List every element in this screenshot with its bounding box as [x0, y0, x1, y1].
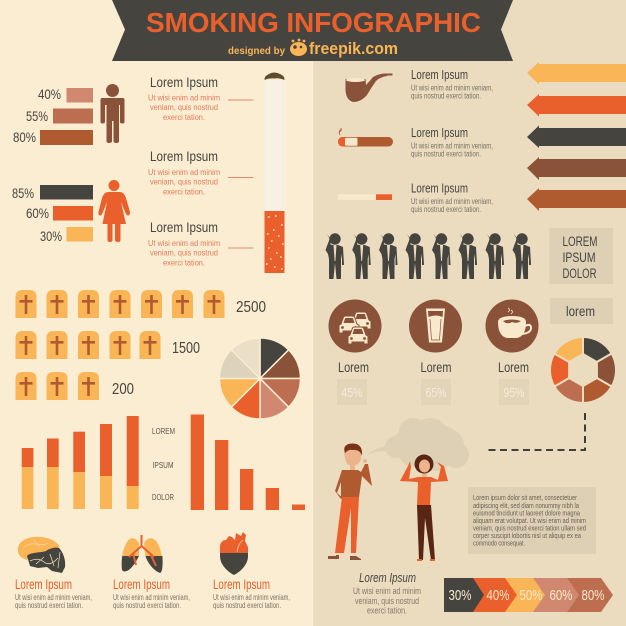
- background: left panel: [0, 0, 313, 626]
- large cigarette: [264, 72, 285, 273]
- icon: man: [100, 84, 124, 143]
- female percentage bars: 60%: [26, 205, 49, 221]
- male percentage bars: [13, 86, 93, 145]
- stat: 45%: Lorem: [338, 360, 369, 375]
- bottom caption: [353, 570, 421, 616]
- callout box: lorem: lorem: [566, 303, 595, 319]
- text block: cigarette label 3: veniam, quis nostrud: [150, 248, 218, 258]
- tombstones row: 200: [16, 372, 134, 400]
- text block: cigarette label 1: Lorem Ipsum: [150, 74, 218, 90]
- stat: 65%: Lorem: [420, 360, 452, 375]
- cigarette text: [411, 182, 493, 214]
- text block: cigarette label 2: Ut wisi enim ad minim: [148, 167, 220, 177]
- text block: cigarette label 1: exerci tation.: [163, 112, 205, 122]
- stat: 65%: [420, 360, 452, 405]
- chart labels: DOLOR: [152, 493, 174, 502]
- text block: cigarette label 3: exerci tation.: [163, 257, 205, 267]
- callout box: lorem ipsum dolor: DOLOR: [562, 266, 597, 281]
- organ caption: heart: Lorem Ipsum: [213, 577, 270, 592]
- female percentage bars: 30%: [40, 228, 62, 244]
- stat: 45%: [337, 360, 369, 405]
- smokers row: [326, 233, 531, 279]
- icon: pipe: [346, 73, 392, 102]
- stat: 95%: Lorem: [498, 360, 529, 375]
- text block: cigarette label 1: veniam, quis nostrud: [150, 102, 218, 112]
- icon: brain: [18, 537, 65, 573]
- text box: euismod tincidunt ut laoreet dolore magna: [473, 508, 581, 518]
- man smoking: [328, 443, 372, 560]
- text block: cigarette label 2: Lorem Ipsum: [150, 148, 218, 164]
- male percentage bars: 80%: [13, 129, 36, 145]
- credit: freepik.com: freepik.com: [309, 39, 398, 58]
- organ caption: lungs: [113, 577, 190, 610]
- icon: cigar: [338, 128, 393, 146]
- female percentage bars: 85%: [12, 185, 34, 201]
- bottom caption: exerci tation.: [367, 606, 407, 616]
- stat: 45%: 45%: [342, 385, 363, 400]
- text block: cigarette label 3: Lorem Ipsum: [150, 219, 218, 235]
- donut chart: [550, 337, 616, 403]
- chevron percentage strip: 30%: [448, 587, 472, 604]
- organ caption: brain: Ut wisi enim ad minim veniam,: [15, 593, 92, 602]
- smoke cloud: [366, 418, 469, 471]
- chevron percentage strip: 60%: [550, 587, 572, 604]
- text box: commodo consequat.: [473, 538, 525, 548]
- callout box: lorem: [550, 298, 613, 324]
- female percentage bars: [12, 185, 93, 244]
- chart labels: IPSUM: [152, 461, 174, 470]
- stat: 95%: 95%: [504, 385, 525, 400]
- icon: lungs: [122, 535, 163, 573]
- text block: cigarette label 2: exerci tation.: [163, 186, 205, 196]
- cigar text: quis nostrud exerci tation.: [411, 150, 481, 158]
- text block: cigarette label 3: [148, 219, 220, 267]
- organ caption: lungs: quis nostrud exerci tation.: [113, 601, 181, 610]
- stat: 95%: [498, 360, 529, 405]
- chevron percentage strip: 50%: [520, 587, 542, 604]
- bottom caption: veniam, quis nostrud: [355, 596, 419, 606]
- organ caption: heart: quis nostrud exerci tation.: [213, 601, 281, 610]
- callout box: lorem ipsum dolor: [550, 228, 613, 284]
- pipe text: quis nostrud exerci tation.: [411, 92, 481, 100]
- text block: cigarette label 3: Ut wisi enim ad minim: [148, 238, 220, 248]
- chevron percentage strip: 40%: [486, 587, 510, 604]
- organ caption: heart: Ut wisi enim ad minim veniam,: [213, 593, 290, 602]
- organ caption: brain: quis nostrud exerci tation.: [15, 601, 83, 610]
- organ caption: lungs: Lorem Ipsum: [113, 577, 170, 592]
- text box: [468, 487, 596, 554]
- icon: traffic circle: [328, 300, 382, 352]
- woman with smoke: [400, 454, 448, 561]
- bottom caption: Lorem Ipsum: [359, 570, 416, 585]
- cigar text: Lorem Ipsum: [411, 126, 468, 140]
- descending bar chart: [191, 414, 305, 510]
- text box: adipiscing elit, sed diam nonummy nibh la: [473, 501, 580, 510]
- text box: Lorem ipsum dolor sit amet, consectetuer: [473, 493, 577, 502]
- icon: heart: [220, 532, 248, 575]
- text box: veniam, quis nostrud exerci tation ullam sed: [473, 524, 586, 532]
- text block: cigarette label 1: [148, 74, 220, 122]
- male percentage bars: 40%: [38, 86, 61, 102]
- bottom caption: Ut wisi enim ad minim: [353, 586, 421, 596]
- organ caption: brain: [15, 577, 92, 610]
- text box: corper suscipit lobortis nisl ut aliquip ex ea: [473, 531, 582, 540]
- cigarette text: Lorem Ipsum: [411, 182, 468, 196]
- tombstones row: 2500: 2500: [236, 299, 266, 316]
- organ caption: lungs: Ut wisi enim ad minim veniam,: [113, 593, 190, 602]
- pipe text: Lorem Ipsum: [411, 68, 468, 82]
- pipe text: Ut wisi enim ad minim veniam,: [411, 84, 493, 92]
- title: SMOKING INFOGRAPHIC: [146, 7, 481, 38]
- tombstones row: 1500: [16, 331, 200, 359]
- dashed connector: [487, 413, 585, 450]
- stat: 65%: 65%: [426, 385, 447, 400]
- pipe text: [411, 68, 493, 100]
- tombstones row: 2500: [16, 290, 266, 318]
- chevron percentage strip: 80%: [582, 587, 604, 604]
- tombstones row: 1500: 1500: [172, 340, 200, 357]
- text block: cigarette label 2: [148, 148, 220, 196]
- chart labels: [152, 427, 175, 502]
- icon: beer glass circle: [409, 300, 462, 352]
- cigar text: Ut wisi enim ad minim veniam,: [411, 142, 493, 150]
- tombstones row: 200: 200: [112, 381, 134, 398]
- male percentage bars: 55%: [26, 108, 48, 124]
- background: right panel: [313, 0, 626, 626]
- icon: coffee cup circle: [486, 300, 538, 352]
- credit: designed by: designed by: [228, 45, 285, 57]
- cigarette text: Ut wisi enim ad minim veniam,: [411, 197, 493, 206]
- title banner: [112, 0, 513, 61]
- icon: freepik logo: [290, 39, 307, 56]
- stacked bar chart: [22, 416, 139, 509]
- chart labels: LOREM: [152, 427, 175, 436]
- callout box: lorem ipsum dolor: LOREM: [562, 234, 598, 249]
- chevron percentage strip: [444, 578, 613, 612]
- arrows: [527, 62, 626, 211]
- callout box: lorem ipsum dolor: IPSUM: [562, 250, 596, 265]
- text block: cigarette label 1: Ut wisi enim ad minim: [148, 92, 220, 102]
- text box: aliquam erat volutpat. Ut wisi enim ad minim: [473, 516, 586, 525]
- cigarette text: quis nostrud exerci tation.: [411, 205, 481, 214]
- cigar text: [411, 126, 493, 158]
- text block: cigarette label 2: veniam, quis nostrud: [150, 176, 218, 186]
- icon: cigarette: [338, 194, 392, 200]
- pie chart: [220, 338, 300, 419]
- organ caption: brain: Lorem Ipsum: [15, 577, 72, 592]
- icon: woman: [98, 180, 130, 242]
- organ caption: heart: [213, 577, 290, 610]
